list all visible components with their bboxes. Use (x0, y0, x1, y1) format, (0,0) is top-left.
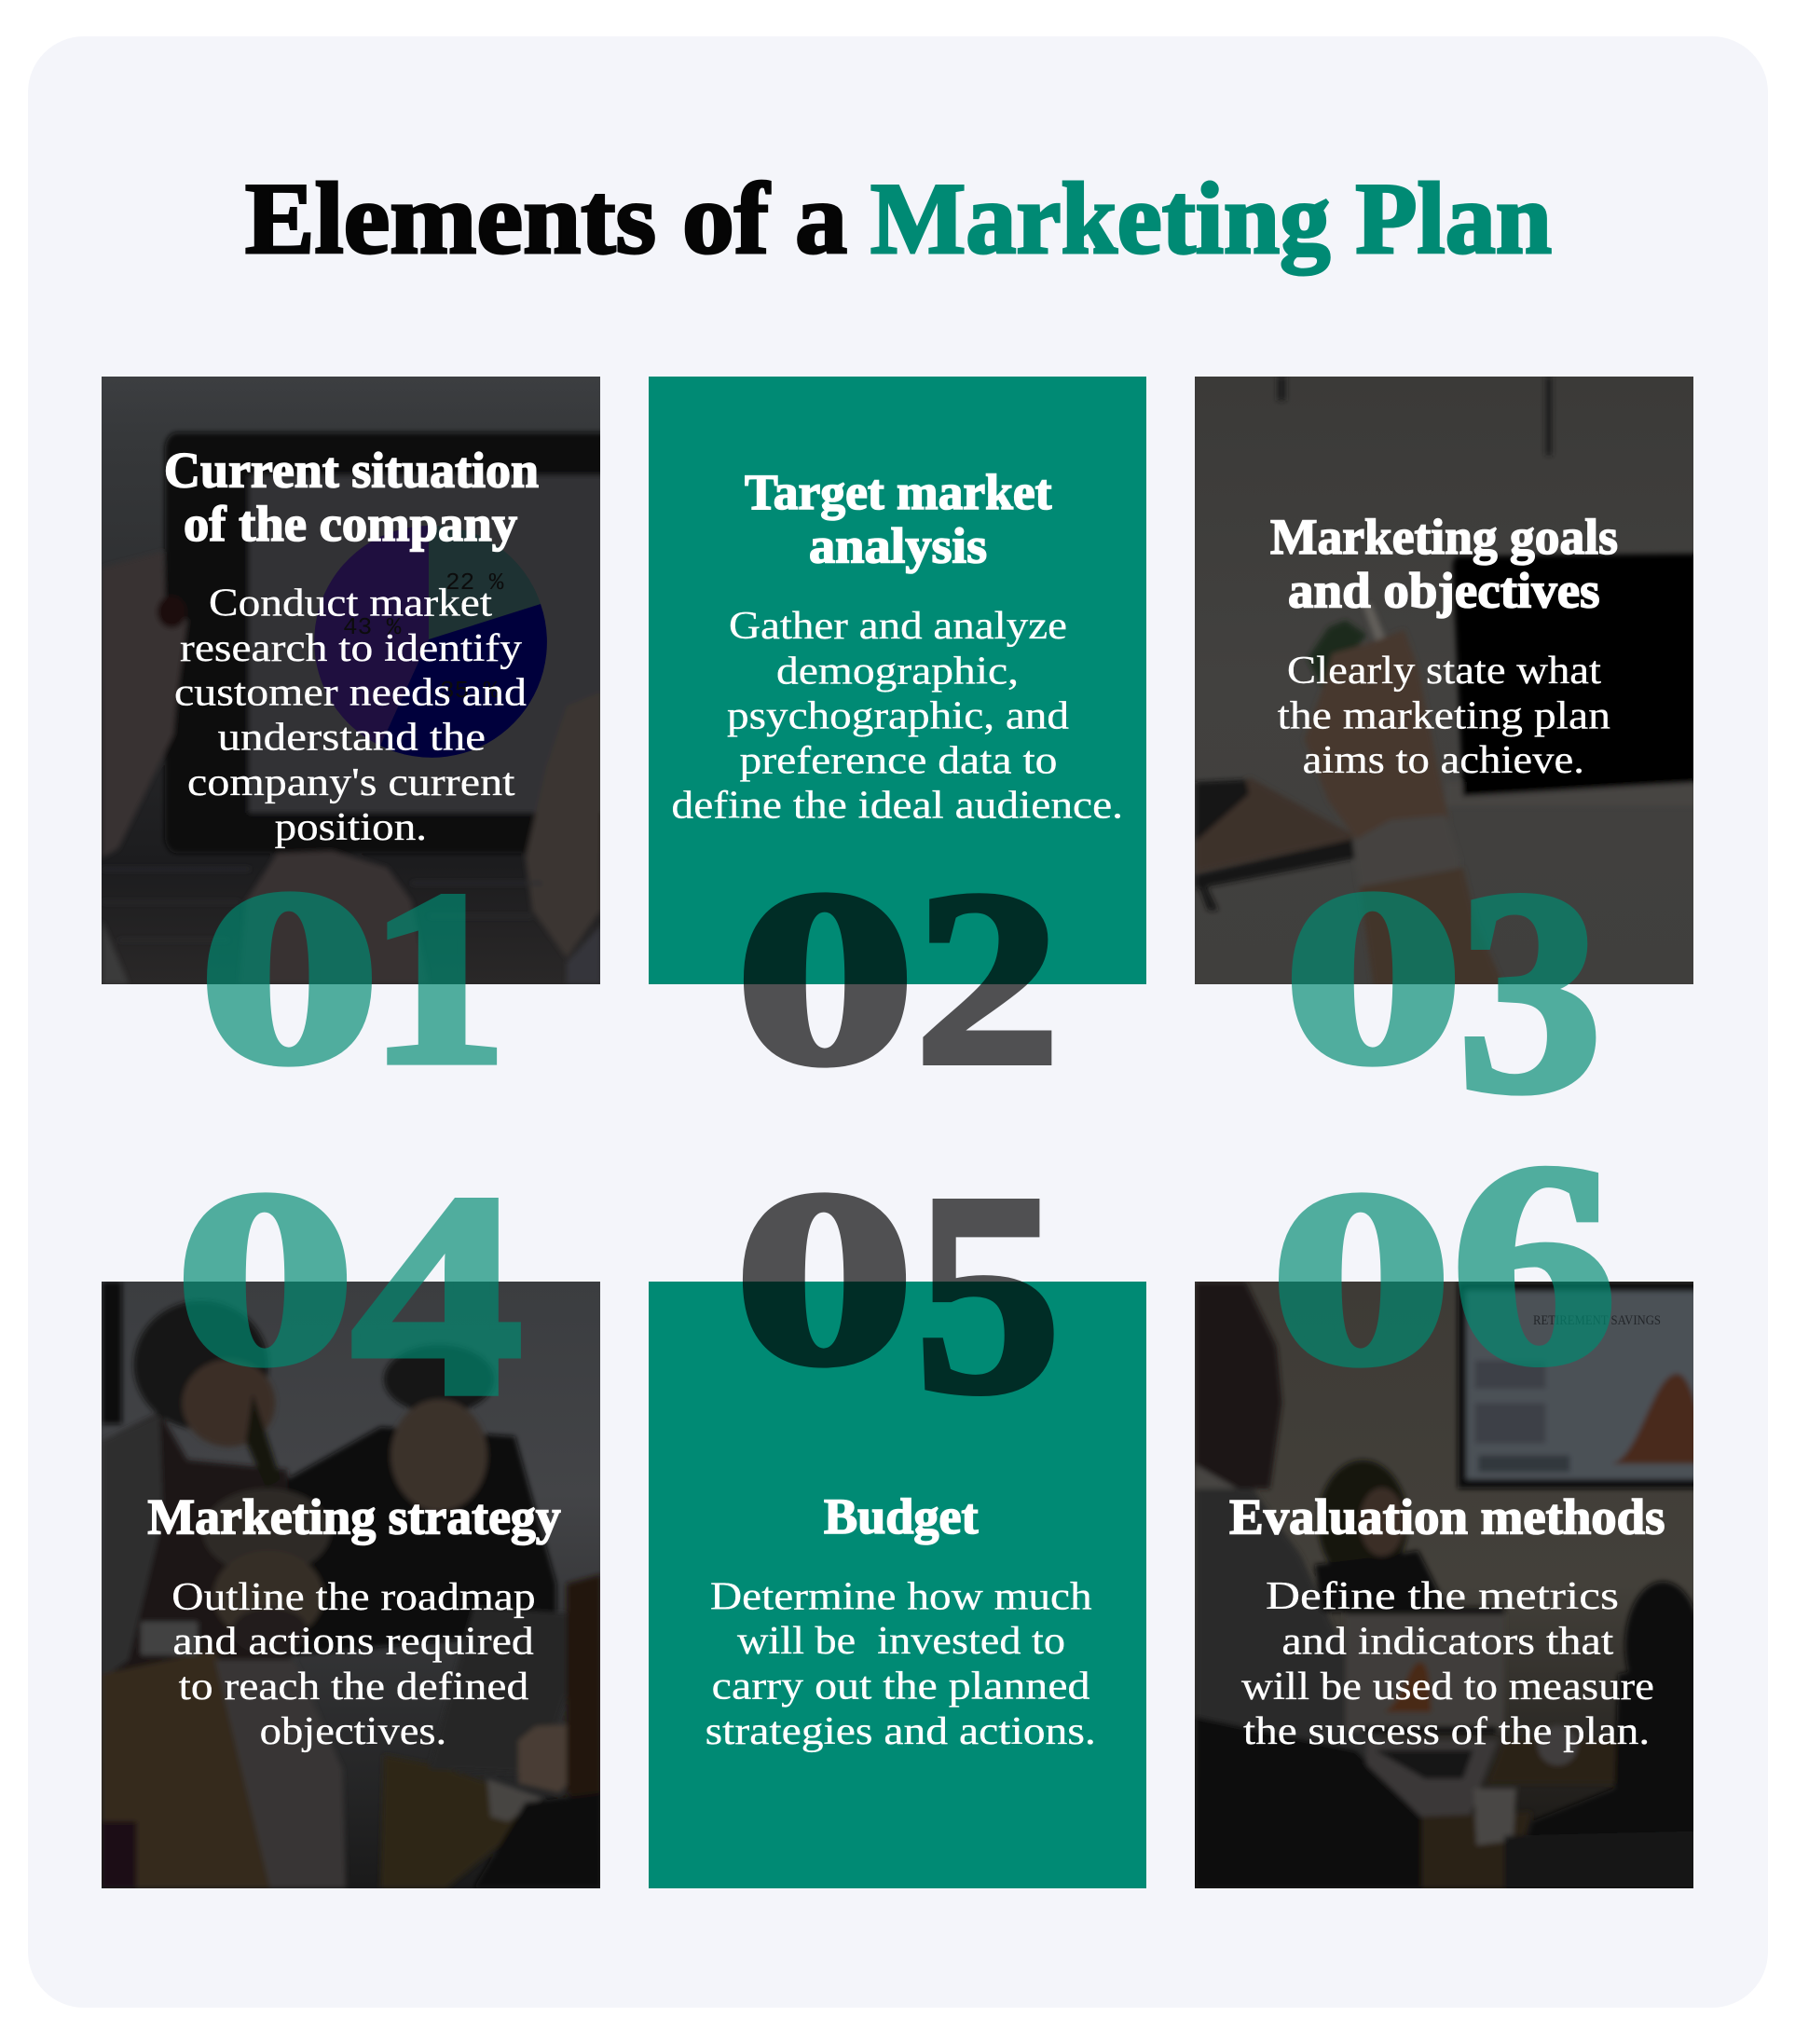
number 03: 0 (1283, 839, 1463, 1115)
body text: Clearly state what (1287, 650, 1601, 693)
body text: research to identify (180, 627, 522, 670)
body text: position. (275, 806, 427, 849)
body text: Determine how much (710, 1575, 1092, 1618)
heading (164, 443, 539, 552)
heading: Marketing goals (1270, 509, 1618, 565)
body text: and indicators that (1281, 1621, 1614, 1664)
heading: Budget (824, 1488, 979, 1544)
number 06: 0 (1270, 1140, 1452, 1416)
panel: card 4 marketing strategy (102, 1282, 601, 1888)
body text: will be invested to (737, 1620, 1065, 1663)
heading: Current situation (164, 443, 539, 499)
body text: psychographic, and (727, 694, 1069, 737)
body text (171, 1576, 536, 1753)
number 04: 0 (175, 1140, 355, 1416)
body text: Conduct market (209, 582, 492, 624)
heading: analysis (809, 518, 987, 574)
number 02: 0 (735, 840, 915, 1116)
body text: aims to achieve. (1303, 739, 1584, 782)
photo: tablet with pie chart (102, 377, 614, 984)
body text (1278, 650, 1610, 782)
title: Elements of a (245, 162, 847, 275)
photo: tablet with pie chart: 22 % (445, 569, 504, 597)
body text (174, 582, 527, 849)
body text: company's current (187, 761, 515, 804)
body text: strategies and actions. (706, 1710, 1096, 1753)
heading (1270, 509, 1618, 619)
body text: to reach the defined (179, 1666, 528, 1708)
number 02 (735, 840, 1060, 1116)
body text: customer needs and (174, 671, 527, 714)
panel: card 1 current situation (102, 377, 614, 984)
number 05: 0 (734, 1140, 914, 1416)
title (245, 162, 1552, 275)
number 05: 5 (915, 1135, 1061, 1452)
photo: meeting room with wall screen (1195, 1282, 1707, 1888)
body text: understand the (218, 716, 486, 759)
panel: card 2 target market (649, 377, 1146, 984)
title: Marketing Plan (870, 162, 1552, 275)
body text (671, 605, 1123, 827)
photo: tablet with pie chart: 43 % (343, 613, 402, 641)
body text: Gather and analyze (729, 605, 1067, 648)
body text (1241, 1575, 1654, 1753)
number 06: 6 (1451, 1104, 1617, 1424)
number 01: 1 (369, 841, 507, 1116)
heading: Marketing strategy (147, 1489, 561, 1545)
body text (706, 1575, 1096, 1753)
body text: the success of the plan. (1243, 1710, 1650, 1753)
number 01: 0 (199, 839, 380, 1115)
body text: Outline the roadmap (171, 1576, 536, 1619)
body text: Define the metrics (1266, 1575, 1619, 1618)
number 03: 3 (1458, 831, 1602, 1153)
number 05 (734, 1135, 1061, 1452)
body text: carry out the planned (712, 1665, 1090, 1708)
body text: will be used to measure (1241, 1666, 1654, 1708)
heading: of the company (184, 496, 517, 552)
heading: Evaluation methods (1229, 1489, 1665, 1545)
photo: meeting room with wall screen: RETIREMENT SAVINGS (1533, 1313, 1661, 1328)
number 02: 2 (915, 840, 1060, 1116)
body text: define the ideal audience. (671, 784, 1123, 827)
photo: hand writing at a desk (1195, 377, 1707, 986)
panel: card 5 budget (649, 1282, 1146, 1888)
number 01 (199, 839, 507, 1116)
body text: demographic, (776, 651, 1019, 693)
photo: colleagues around a tablet (102, 1282, 601, 1888)
heading: and objectives (1288, 563, 1599, 619)
number 03 (1283, 831, 1602, 1153)
photo: tablet with pie chart: 35 % (440, 677, 499, 705)
body text: the marketing plan (1278, 694, 1610, 737)
number 06 (1270, 1104, 1617, 1424)
heading (745, 464, 1052, 574)
body text: and actions required (172, 1621, 534, 1664)
body text: preference data to (740, 740, 1057, 783)
body text: objectives. (260, 1710, 446, 1753)
number 04 (175, 1135, 523, 1456)
number 04: 4 (351, 1135, 523, 1456)
heading: Target market (745, 464, 1052, 520)
panel: card 6 evaluation methods (1195, 1282, 1707, 1888)
panel: card 3 marketing goals (1195, 377, 1707, 986)
